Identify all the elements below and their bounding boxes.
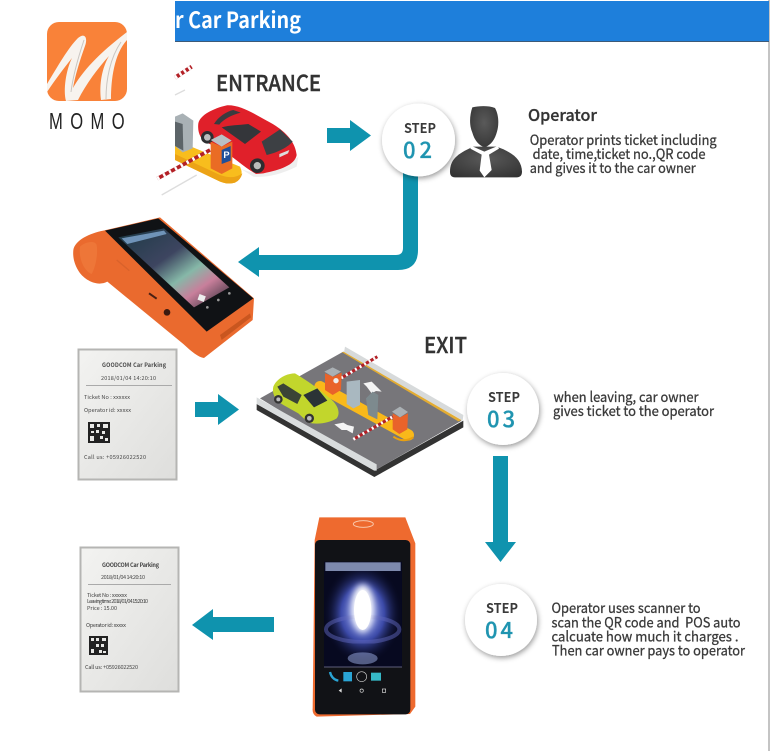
- step 03 label: STEP: [488, 386, 520, 406]
- step 04 number: 04: [485, 613, 513, 645]
- receipt: entry ticket: [78, 350, 176, 480]
- heading: exit: EXIT: [424, 328, 467, 360]
- arrow: step 03 to step 04: [485, 456, 516, 562]
- illustration: exit gate with yellow car: [257, 347, 463, 477]
- operator description: [530, 130, 717, 178]
- text block: step 03 description: when leaving, car owner: [554, 387, 699, 407]
- header banner: [175, 1, 769, 42]
- POS terminal front view: [313, 517, 415, 717]
- step 02 label: STEP: [404, 117, 436, 137]
- illustration: entrance gate with red car: P: [223, 150, 230, 160]
- step 02 badge: [382, 104, 455, 176]
- ticket text: Call us: +05926022520: [84, 453, 146, 461]
- operator description: and gives it to the car owner: [530, 158, 696, 178]
- POS terminal angled view: [73, 217, 254, 358]
- logo: MOMO: [47, 22, 127, 135]
- text block: step 04 description: Then car owner pays to operator: [552, 641, 746, 661]
- step 04 label: STEP: [486, 597, 518, 617]
- icon: operator silhouette: [450, 106, 522, 177]
- step 03 number: 03: [487, 402, 515, 434]
- ticket QR code: [88, 422, 110, 443]
- exit ticket text: Leaving time: 2018/01/04 15:20:10: [87, 597, 148, 605]
- logo tile: [47, 22, 127, 101]
- exit ticket QR code: [89, 636, 108, 655]
- text block: step 04 description: Operator uses scanner to: [552, 598, 700, 618]
- step 02 number: 02: [403, 133, 432, 165]
- exit ticket text: Call us: +05926022520: [85, 663, 138, 671]
- banner title: r Car Parking: [175, 3, 301, 35]
- exit ticket text: Operator id: xxxxx: [86, 621, 126, 629]
- receipt: exit ticket with price: [80, 548, 178, 692]
- exit ticket text: Ticket No : xxxxxx: [87, 591, 127, 599]
- exit ticket text: [85, 561, 160, 671]
- connector arrow: step 02 to POS terminal: [238, 170, 418, 277]
- text block: step 03 description: gives ticket to the operator: [553, 401, 715, 421]
- text block: step 04 description: [552, 598, 746, 661]
- ticket text: Operator id: xxxxx: [84, 406, 131, 414]
- page right border: [768, 0, 770, 751]
- arrow: ticket to exit: [195, 394, 239, 425]
- arrow: POS terminal to final receipt: [192, 609, 274, 640]
- exit ticket text: Price : 15.00: [87, 604, 117, 612]
- ticket text: Ticket No : xxxxxx: [84, 393, 130, 401]
- illustration: entrance gate with red car: [157, 67, 298, 195]
- text block: operator: [528, 102, 717, 178]
- step 04 badge: [465, 584, 537, 656]
- arrow: entrance to step 02: [327, 120, 371, 151]
- ticket text: 2018/01/04 14:20:10: [101, 374, 156, 382]
- heading: entrance: ENTRANCE: [216, 66, 321, 98]
- exit ticket text: GOODCOM Car Parking: [102, 561, 160, 569]
- operator description: Operator prints ticket including: [530, 130, 717, 150]
- exit ticket text: 2018/01/04 14:20:10: [101, 573, 145, 581]
- step 03 badge: [467, 373, 539, 445]
- text block: step 04 description: calcuate how much it charges .: [552, 627, 738, 647]
- logo wordmark: MOMO: [49, 109, 125, 135]
- operator description: date, time,ticket no.,QR code: [533, 144, 706, 164]
- text block: step 04 description: scan the QR code and POS auto: [552, 613, 740, 633]
- ticket text: [84, 361, 167, 461]
- ticket text: GOODCOM Car Parking: [102, 361, 167, 369]
- operator heading: Operator: [528, 102, 597, 126]
- text block: step 03 description: [553, 387, 715, 421]
